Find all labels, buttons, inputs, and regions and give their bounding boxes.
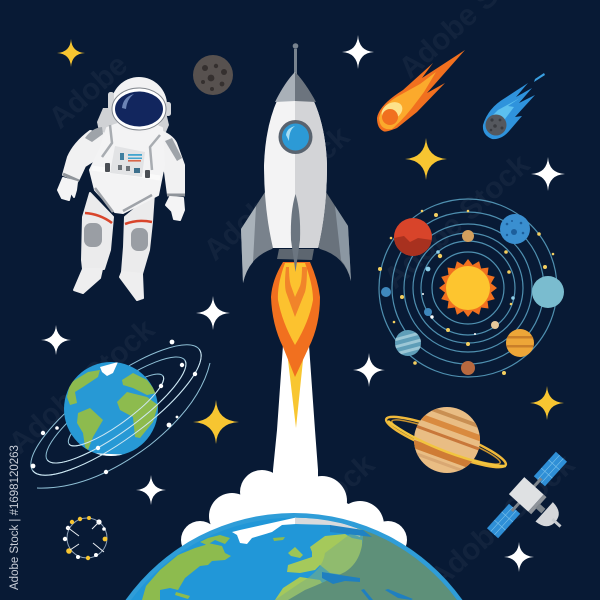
brown planet xyxy=(461,361,475,375)
star white xyxy=(196,296,230,330)
eurasia xyxy=(122,373,157,395)
dish xyxy=(535,502,564,532)
stars xyxy=(41,35,565,572)
planet body xyxy=(414,407,480,473)
hip lines xyxy=(95,188,152,212)
right cuff xyxy=(167,194,185,196)
small earth with orbits xyxy=(30,340,210,489)
africa xyxy=(275,577,322,600)
left cuff xyxy=(63,174,79,181)
ice caps xyxy=(100,362,118,376)
suit seams xyxy=(102,125,160,170)
twilight band xyxy=(276,528,366,600)
small blue planet xyxy=(424,308,432,316)
orbits xyxy=(379,199,557,377)
star gold large xyxy=(193,400,239,444)
right boot xyxy=(120,272,143,300)
right shoulder pad xyxy=(165,138,182,161)
pale blue planet xyxy=(532,276,564,308)
british isles xyxy=(288,547,303,558)
small blue planet xyxy=(381,287,391,297)
left fin xyxy=(241,192,280,283)
left arm xyxy=(63,131,112,181)
star white xyxy=(531,157,565,191)
watermark text: Adobe Stock xyxy=(198,120,356,267)
saturn xyxy=(384,407,508,473)
satellite xyxy=(482,447,596,564)
left leg xyxy=(82,193,113,269)
feed horn xyxy=(551,518,562,528)
right leg xyxy=(122,193,154,274)
large earth xyxy=(126,513,462,600)
body xyxy=(509,477,544,512)
grey ice xyxy=(295,518,362,537)
north america xyxy=(67,370,100,405)
red leg bands xyxy=(85,213,152,224)
star white xyxy=(41,325,71,355)
star white xyxy=(342,35,374,69)
exhaust plume xyxy=(273,345,318,500)
iceland xyxy=(273,537,285,541)
caribbean islands xyxy=(175,592,190,599)
torso xyxy=(90,122,164,213)
backpack xyxy=(97,108,169,139)
blue comet xyxy=(483,73,545,139)
sun xyxy=(439,259,497,317)
red sea xyxy=(361,589,373,600)
small tan planet xyxy=(491,321,499,329)
left shoulder pad xyxy=(85,127,103,142)
knee pads xyxy=(84,223,102,247)
rocket flame and exhaust xyxy=(271,262,320,500)
orange banded planet xyxy=(506,329,534,357)
solar panel upper xyxy=(534,452,567,486)
nose cone xyxy=(275,72,295,102)
mediterranean xyxy=(322,572,360,584)
solar system xyxy=(378,199,564,377)
asteroid moon xyxy=(193,55,233,95)
centre fin xyxy=(291,194,300,272)
left boot xyxy=(74,269,102,293)
porthole xyxy=(278,120,312,154)
persian gulf xyxy=(385,589,413,600)
striped planet xyxy=(395,330,421,356)
chest panel xyxy=(105,146,150,178)
right fin xyxy=(310,192,351,281)
helmet xyxy=(111,77,167,133)
flame core xyxy=(289,267,302,297)
night shadow xyxy=(288,530,457,600)
orbit stars xyxy=(378,210,554,375)
engine nozzle xyxy=(277,249,314,260)
visor xyxy=(112,88,166,130)
ring front xyxy=(388,421,506,466)
tan planet xyxy=(462,230,474,242)
body xyxy=(264,72,327,248)
star white xyxy=(504,542,534,572)
red planet xyxy=(394,218,432,256)
orbit sparkles xyxy=(31,340,197,474)
south america xyxy=(77,408,103,450)
orange comet xyxy=(377,50,465,132)
africa xyxy=(117,392,158,438)
star gold xyxy=(530,386,564,420)
north america xyxy=(142,543,231,600)
outer open orbit xyxy=(37,363,210,488)
globe xyxy=(64,362,158,456)
yellow tail xyxy=(288,360,303,428)
watermark text: Adobe Stock xyxy=(423,448,581,595)
star ring xyxy=(63,516,107,560)
star gold xyxy=(57,39,85,67)
stock id caption: Adobe Stock | #1698120263 xyxy=(9,445,21,590)
watermark text: Adobe Stock xyxy=(3,313,161,460)
panel arm xyxy=(511,477,542,512)
front orbits xyxy=(33,349,217,495)
star gold large xyxy=(405,138,447,180)
arctic islands xyxy=(200,535,230,545)
flame outer xyxy=(271,262,320,377)
ring back xyxy=(382,409,510,475)
astronaut xyxy=(58,77,185,300)
star white xyxy=(353,353,385,387)
blue cratered planet xyxy=(500,214,530,244)
atmosphere rim xyxy=(126,513,462,600)
europe xyxy=(287,534,362,575)
blue sky edge over night side xyxy=(330,525,372,537)
right glove xyxy=(166,197,184,220)
rocket xyxy=(241,43,351,283)
dish stem xyxy=(535,504,545,513)
left glove xyxy=(58,178,77,200)
back orbits xyxy=(15,325,217,495)
watermark text: Adobe xyxy=(43,48,134,135)
ocean xyxy=(131,518,457,600)
body shade xyxy=(528,494,547,514)
flame yellow xyxy=(278,263,313,345)
watermark text: Adobe Stock xyxy=(223,448,381,595)
flame inner orange xyxy=(285,267,307,317)
star white xyxy=(136,475,166,505)
solar panel lower xyxy=(487,504,520,538)
antenna xyxy=(294,49,297,75)
watermark text: Adobe Stock xyxy=(378,148,536,295)
polar ice xyxy=(232,518,296,544)
right arm xyxy=(153,130,184,195)
waist strap xyxy=(92,168,160,178)
smoke cloud xyxy=(181,470,407,565)
